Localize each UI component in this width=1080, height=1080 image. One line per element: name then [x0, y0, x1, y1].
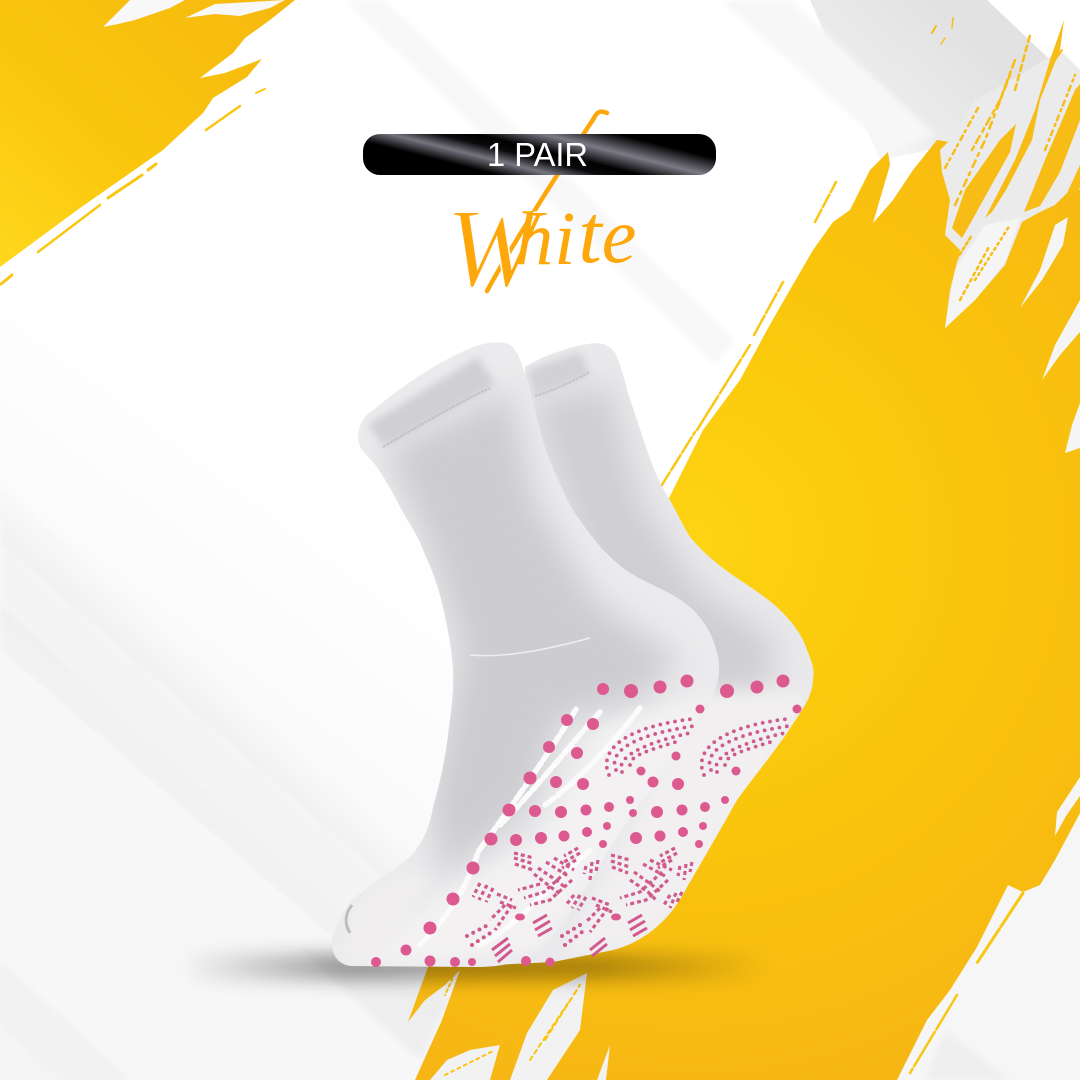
front sock [332, 343, 719, 967]
script heading: White: e [602, 192, 636, 279]
embossed white stripes [420, 706, 640, 945]
long ascender swoosh [487, 112, 607, 291]
label pill: 1 pair: 1 PAIR [487, 136, 588, 173]
right yellow brush stroke [408, 18, 1080, 1080]
script heading: White: W [446, 187, 548, 311]
yellow streaks over scratches [952, 20, 1080, 238]
script heading: White: h [515, 197, 553, 281]
socks product photo [332, 343, 814, 967]
script heading: White [446, 112, 636, 311]
back sock [453, 343, 814, 967]
forefoot dash patterns [473, 848, 692, 932]
toe bar patterns [492, 915, 647, 962]
script heading: White: t [578, 188, 604, 281]
heel crescent dot patterns [607, 719, 789, 775]
label pill: 1 pair [363, 134, 716, 175]
bottom white scratches [430, 973, 610, 1080]
script heading: White: i [554, 197, 575, 281]
ground shadow [180, 954, 770, 980]
thin yellow flecks outside the left edge [660, 182, 1023, 1073]
pink round grip dots [371, 674, 802, 967]
white scratches inside yellow [1020, 217, 1080, 836]
grey scratched area top right [940, 50, 1080, 328]
top-left yellow brush stroke [0, 0, 295, 284]
